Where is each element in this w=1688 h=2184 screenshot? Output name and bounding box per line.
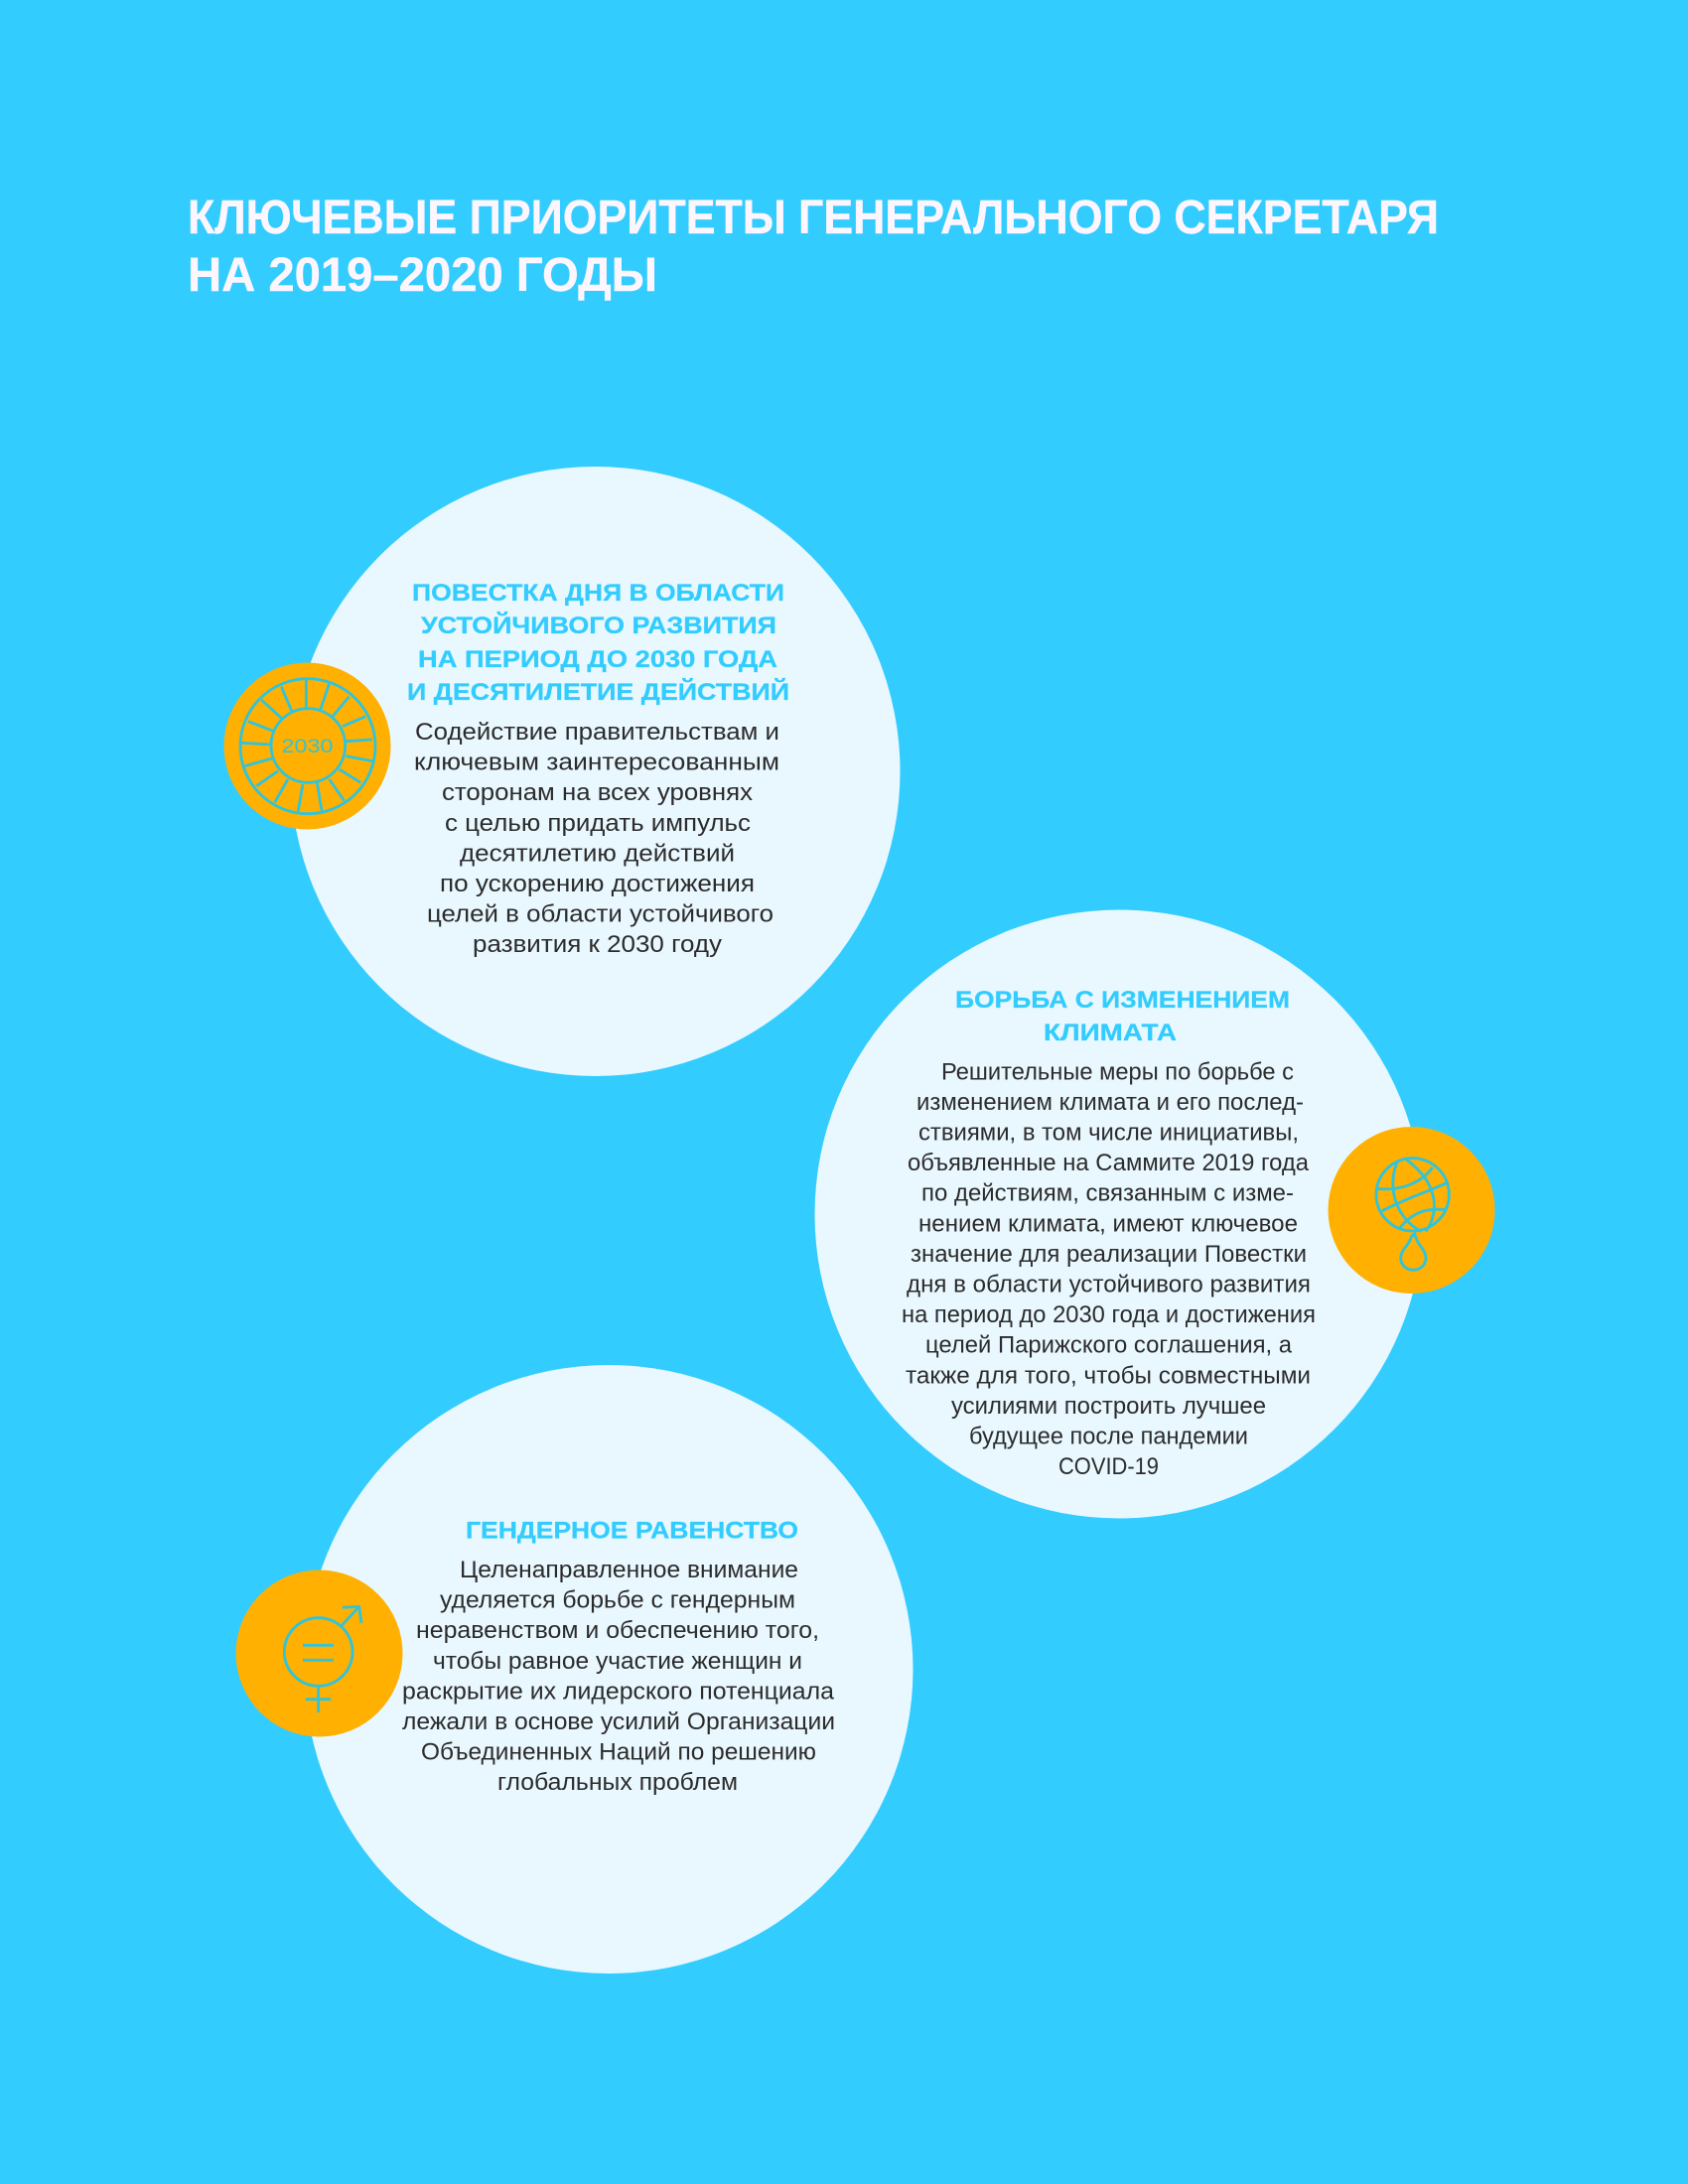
text block: climate: усилиями построить лучшее: [951, 1393, 1266, 1420]
text block: gender equality: чтобы равное участие женщин и: [433, 1648, 802, 1675]
heading: 2030 agenda: УСТОЙЧИВОГО РАЗВИТИЯ: [421, 612, 776, 639]
text block: gender equality: Целенаправленное внимание: [460, 1557, 798, 1583]
text block: climate: на период до 2030 года и достижения: [902, 1301, 1316, 1328]
text block: climate: [902, 1058, 1316, 1480]
panel: 2030 agenda: [224, 467, 900, 1076]
text block: climate: объявленные на Саммите 2019 года: [908, 1150, 1309, 1176]
text block: 2030 agenda: [414, 719, 779, 958]
text block: climate: нением климата, имеют ключевое: [918, 1210, 1298, 1237]
panel: climate: [814, 909, 1495, 1519]
text block: climate: изменением климата и его послед-: [916, 1089, 1304, 1116]
text block: climate: будущее после пандемии: [969, 1424, 1248, 1449]
text block: gender equality: уделяется борьбе с гендерным: [440, 1587, 795, 1614]
icon: gender equality symbol: [236, 1570, 403, 1737]
circle: gender equality background: [304, 1365, 914, 1974]
text block: gender equality: [402, 1557, 835, 1796]
text block: gender equality: лежали в основе усилий Организации: [402, 1708, 835, 1735]
heading: 2030 agenda: И ДЕСЯТИЛЕТИЕ ДЕЙСТВИЙ: [407, 678, 789, 706]
icon: 2030 wheel: 2030: [282, 737, 334, 757]
heading: gender equality: ГЕНДЕРНОЕ РАВЕНСТВО: [466, 1517, 798, 1544]
text block: gender equality: глобальных проблем: [497, 1769, 738, 1796]
text block: climate: целей Парижского соглашения, а: [925, 1332, 1292, 1359]
icon: globe with drop: [1329, 1127, 1495, 1294]
text block: climate: Решительные меры по борьбе с: [941, 1058, 1294, 1085]
text block: 2030 agenda: десятилетию действий: [460, 840, 735, 867]
heading: 2030 agenda: [407, 580, 789, 706]
text block: 2030 agenda: развития к 2030 году: [473, 931, 723, 958]
text block: climate: по действиям, связанным с изме-: [921, 1180, 1294, 1207]
text block: 2030 agenda: по ускорению достижения: [440, 871, 755, 897]
heading: 2030 agenda: ПОВЕСТКА ДНЯ В ОБЛАСТИ: [412, 580, 784, 607]
text block: climate: ствиями, в том числе инициативы,: [918, 1120, 1299, 1146]
circle: climate background: [814, 909, 1424, 1519]
circle: 2030 agenda background: [290, 467, 900, 1076]
heading: climate: КЛИМАТА: [1044, 1020, 1177, 1046]
text block: 2030 agenda: сторонам на всех уровнях: [442, 779, 753, 806]
text block: climate: значение для реализации Повестки: [911, 1241, 1307, 1268]
text block: gender equality: Объединенных Наций по решению: [421, 1739, 816, 1766]
text block: 2030 agenda: Содействие правительствам и: [415, 719, 779, 746]
text block: gender equality: раскрытие их лидерского потенциала: [402, 1678, 834, 1705]
text block: gender equality: неравенством и обеспечению того,: [416, 1617, 819, 1644]
text block: 2030 agenda: ключевым заинтересованным: [414, 750, 779, 776]
heading: climate: [955, 987, 1290, 1046]
panel: gender equality: [236, 1365, 914, 1974]
title: КЛЮЧЕВЫЕ ПРИОРИТЕТЫ ГЕНЕРАЛЬНОГО СЕКРЕТАРЯ: [188, 192, 1439, 244]
text block: climate: также для того, чтобы совместными: [906, 1362, 1311, 1389]
text block: 2030 agenda: с целью придать импульс: [445, 810, 751, 837]
title: НА 2019–2020 ГОДЫ: [188, 249, 657, 302]
icon: 2030 wheel: [224, 663, 391, 830]
title: [188, 192, 1439, 302]
text block: 2030 agenda: целей в области устойчивого: [427, 901, 774, 928]
text block: climate: COVID-19: [1058, 1453, 1159, 1480]
heading: climate: БОРЬБА С ИЗМЕНЕНИЕМ: [955, 987, 1290, 1014]
text block: climate: дня в области устойчивого развития: [907, 1271, 1311, 1298]
heading: 2030 agenda: НА ПЕРИОД ДО 2030 ГОДА: [418, 646, 777, 673]
